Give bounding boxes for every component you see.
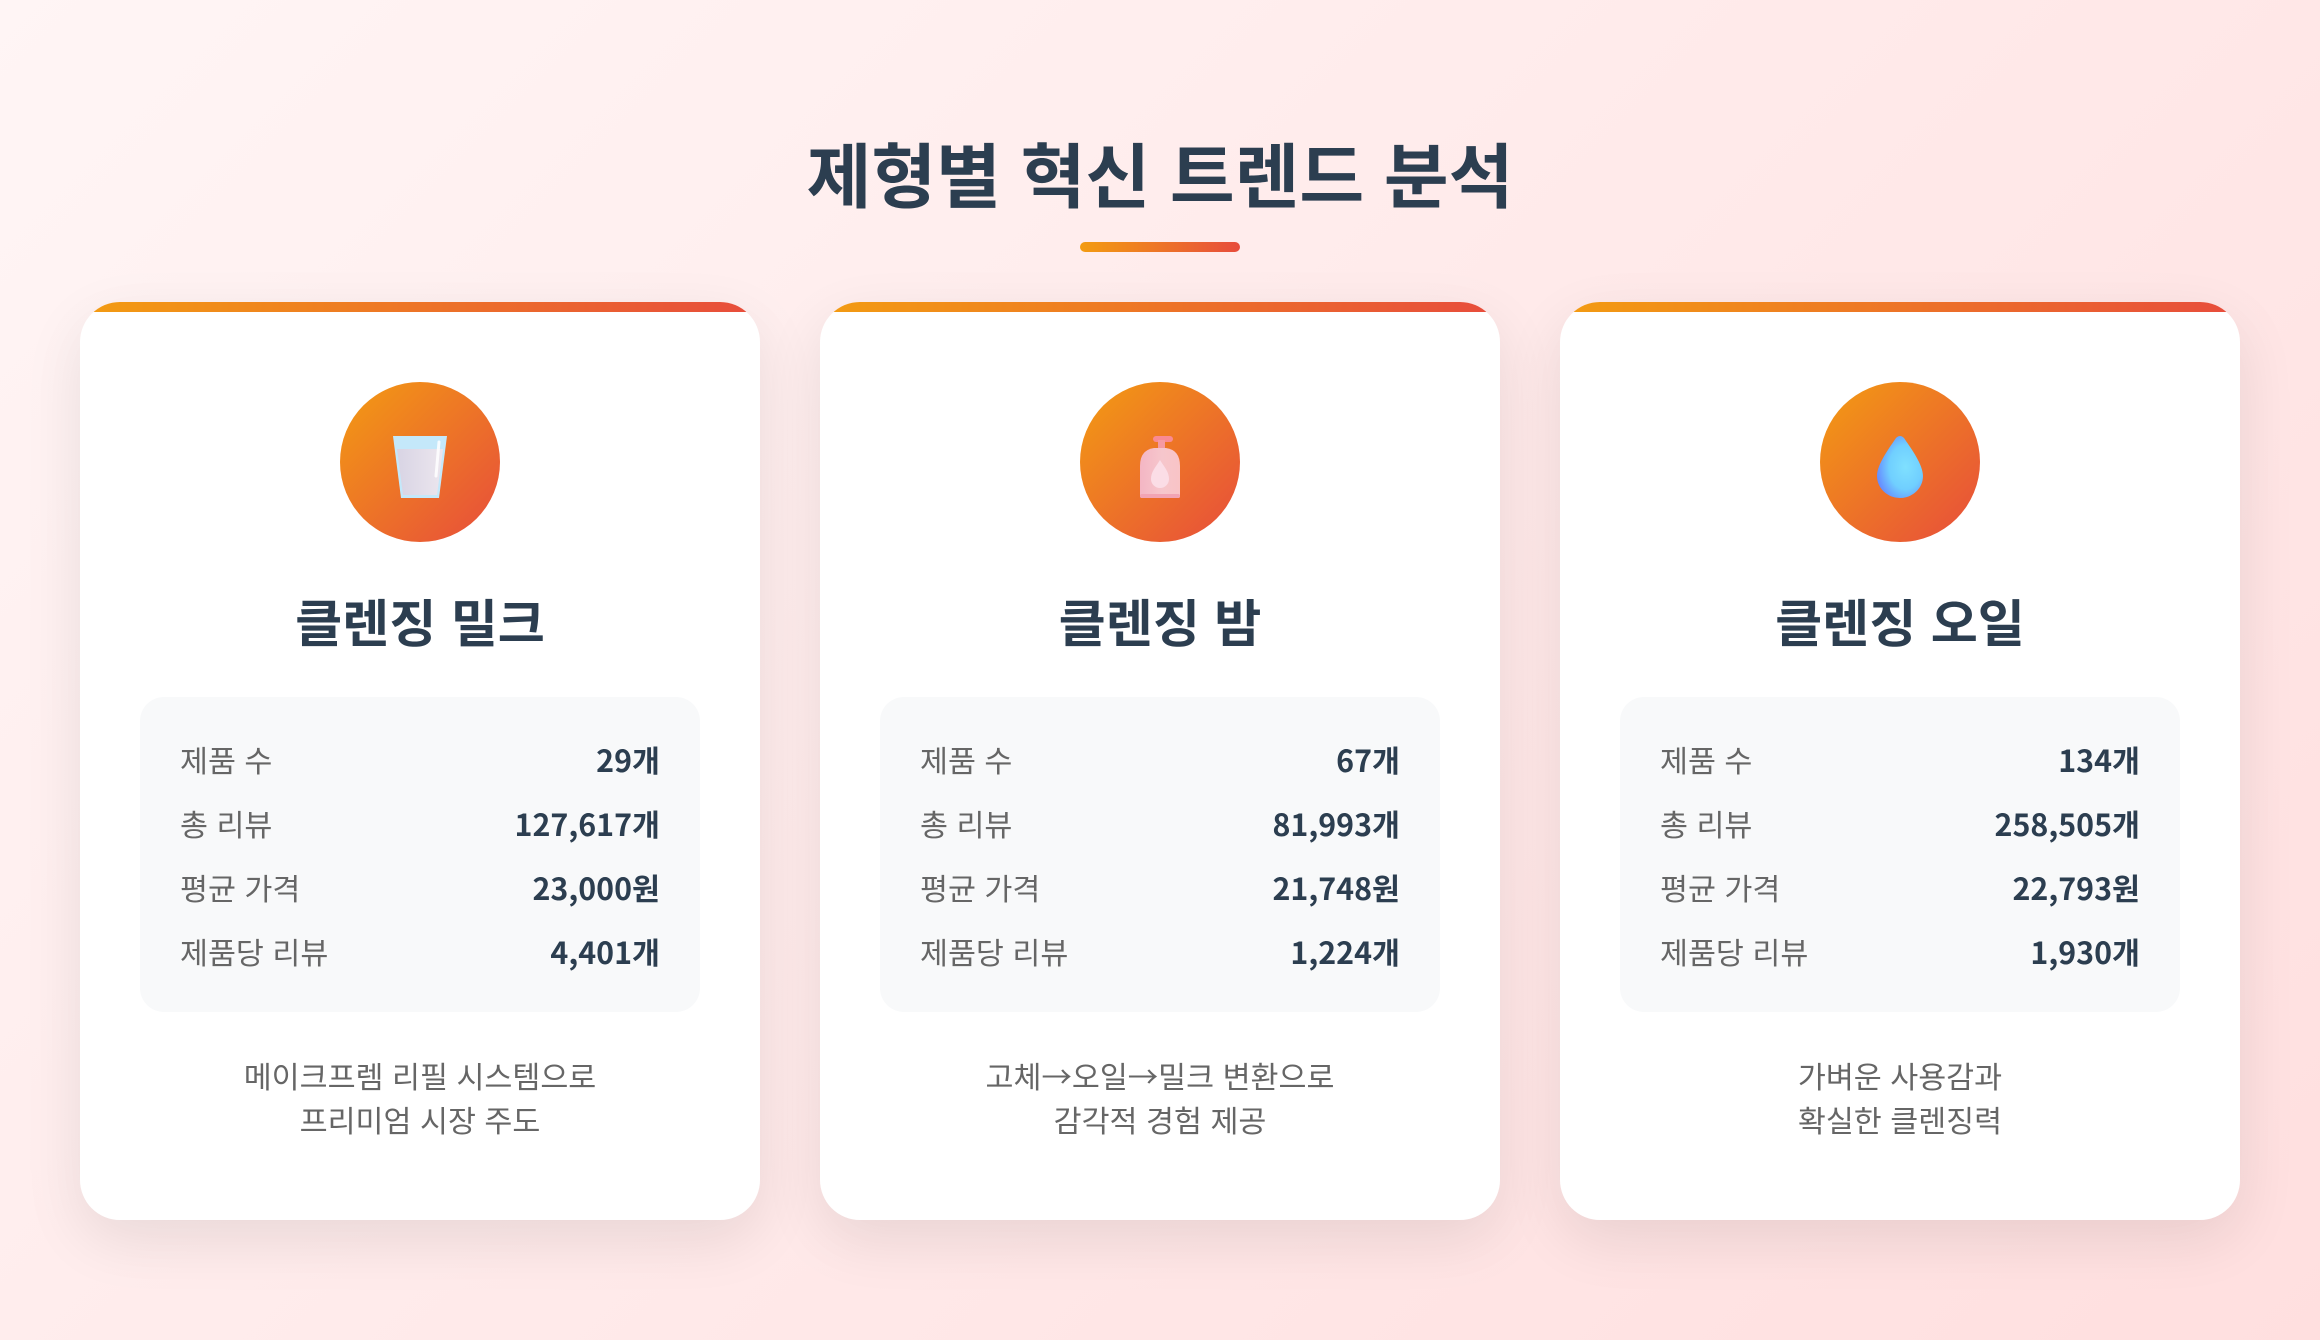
stat: product count: 67개	[1336, 737, 1400, 781]
card heading: 클렌징 밀크	[295, 583, 545, 657]
stat: product count	[1660, 737, 2140, 781]
card heading: 클렌징 밤	[1059, 583, 1261, 657]
stat: total reviews: 127,617개	[515, 801, 660, 845]
card top accent bar	[1560, 302, 2240, 312]
icon: oil drop	[1820, 382, 1980, 542]
stat: average price	[180, 865, 660, 909]
card top accent bar	[820, 302, 1500, 312]
description: 감각적 경험 제공	[1054, 1097, 1266, 1141]
stat: reviews per product: 제품당 리뷰	[920, 929, 1068, 973]
description	[244, 1053, 596, 1141]
stat: total reviews: 총 리뷰	[180, 801, 272, 845]
stat: reviews per product: 1,930개	[2030, 929, 2140, 973]
stat: product count	[180, 737, 660, 781]
stats table	[140, 697, 700, 1012]
description	[986, 1053, 1334, 1141]
stat: average price: 평균 가격	[180, 865, 300, 909]
description: 프리미엄 시장 주도	[300, 1097, 540, 1141]
title: 제형별 혁신 트렌드 분석	[807, 121, 1513, 223]
stat: reviews per product: 제품당 리뷰	[180, 929, 328, 973]
stat: product count: 134개	[2058, 737, 2140, 781]
stat: product count: 제품 수	[920, 737, 1012, 781]
stat: reviews per product: 4,401개	[550, 929, 660, 973]
stat: total reviews: 총 리뷰	[1660, 801, 1752, 845]
stat: product count: 제품 수	[180, 737, 272, 781]
stat: average price	[1660, 865, 2140, 909]
stat: average price: 평균 가격	[920, 865, 1040, 909]
stat: reviews per product	[1660, 929, 2140, 973]
stat: product count: 제품 수	[1660, 737, 1752, 781]
stat: total reviews	[1660, 801, 2140, 845]
icon: balm pump bottle	[1080, 382, 1240, 542]
stat: average price	[920, 865, 1400, 909]
description: 가벼운 사용감과	[1798, 1053, 2002, 1097]
description: 메이크프렘 리필 시스템으로	[244, 1053, 596, 1097]
stat: total reviews: 258,505개	[1995, 801, 2140, 845]
stat: product count	[920, 737, 1400, 781]
description: 고체→오일→밀크 변환으로	[986, 1053, 1334, 1097]
stat: average price: 22,793원	[2012, 865, 2140, 909]
icon: glass of milk	[340, 382, 500, 542]
stats table	[880, 697, 1440, 1012]
stat: average price: 23,000원	[532, 865, 660, 909]
stats table	[1620, 697, 2180, 1012]
stat: reviews per product: 1,224개	[1290, 929, 1400, 973]
title underline	[1080, 242, 1240, 252]
card heading: 클렌징 오일	[1775, 583, 2025, 657]
panel: cleansing oil	[1560, 302, 2240, 1220]
stat: reviews per product	[180, 929, 660, 973]
panel: cleansing balm	[820, 302, 1500, 1220]
description	[1798, 1053, 2002, 1141]
stat: average price: 평균 가격	[1660, 865, 1780, 909]
card top accent bar	[80, 302, 760, 312]
stat: product count: 29개	[596, 737, 660, 781]
stat: total reviews: 총 리뷰	[920, 801, 1012, 845]
description: 확실한 클렌징력	[1798, 1097, 2002, 1141]
stat: total reviews	[920, 801, 1400, 845]
stat: total reviews: 81,993개	[1272, 801, 1400, 845]
stat: average price: 21,748원	[1272, 865, 1400, 909]
stat: total reviews	[180, 801, 660, 845]
panel: cleansing milk	[80, 302, 760, 1220]
stat: reviews per product	[920, 929, 1400, 973]
stat: reviews per product: 제품당 리뷰	[1660, 929, 1808, 973]
